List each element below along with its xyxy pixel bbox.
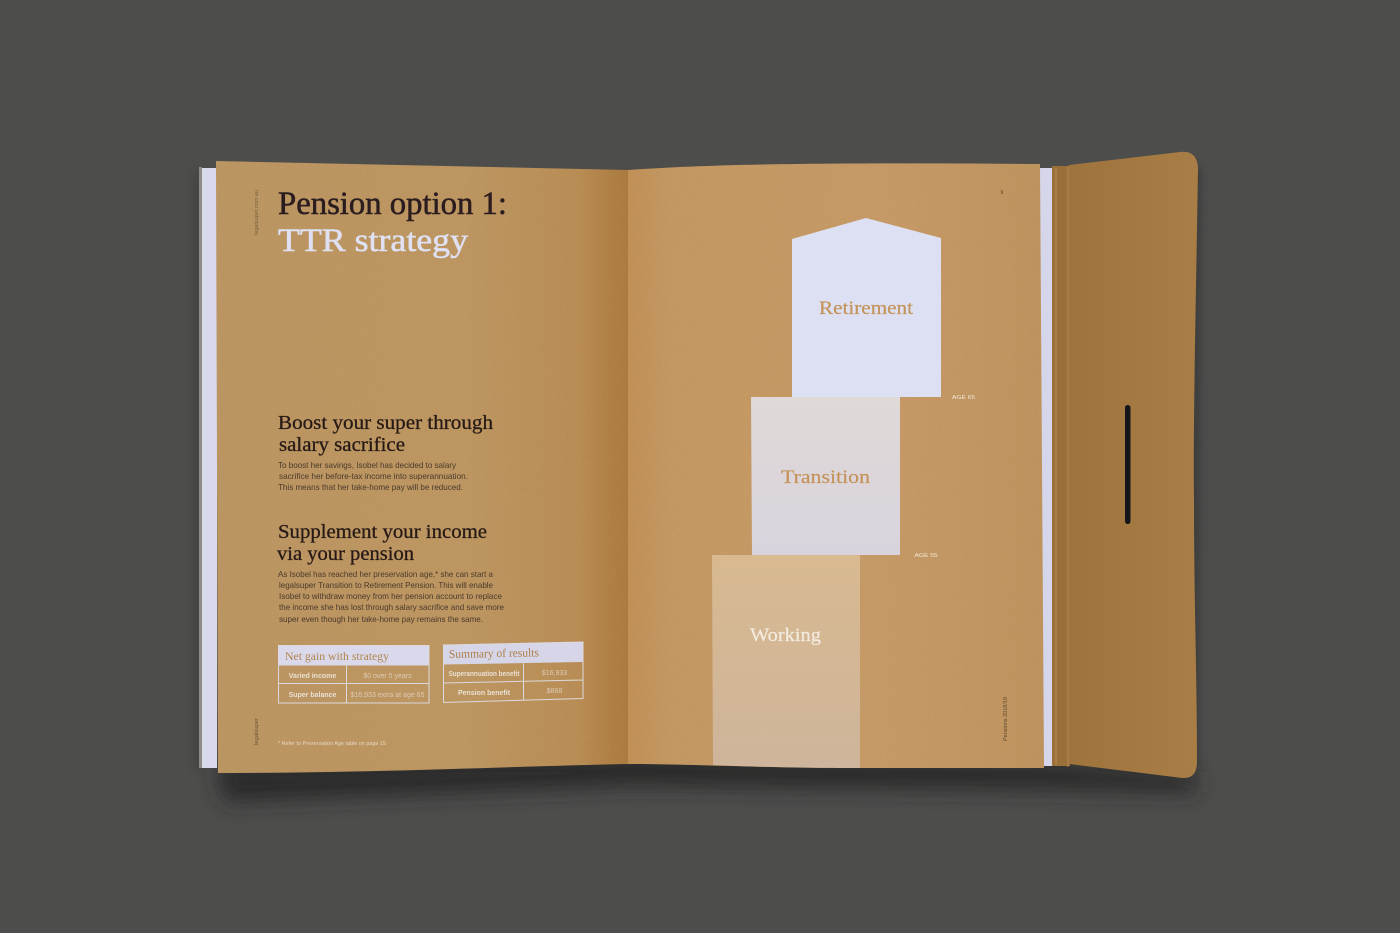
stage: transition: Transition — [781, 467, 871, 488]
right page content — [712, 190, 1009, 768]
table: net gain with strategy: Net gain with strategy — [285, 649, 389, 663]
table: summary of results: Superannuation benefit — [448, 671, 520, 678]
body text: boost your super: sacrifice her before-tax income into superannuation. — [279, 471, 468, 481]
heading: boost your super — [278, 412, 493, 456]
table: net gain with strategy: $0 over 5 years — [363, 673, 412, 680]
title: TTR strategy — [278, 223, 469, 259]
heading: supplement your income — [277, 521, 487, 565]
body text: boost your super — [278, 460, 468, 492]
heading: supplement your income: Supplement your income — [278, 521, 487, 543]
body text: supplement your income — [278, 569, 504, 624]
stage: working: Working — [750, 625, 822, 646]
heading: supplement your income: via your pension — [277, 543, 414, 565]
label: age 65: AGE 65 — [952, 395, 975, 401]
table: summary of results — [444, 642, 583, 702]
heading: boost your super: Boost your super through — [278, 412, 493, 434]
paper speckle texture — [216, 160, 1046, 774]
body text: supplement your income: As Isobel has reached her preservation age,* she can start a — [278, 569, 493, 579]
table: net gain with strategy: Varied income — [289, 673, 336, 680]
folder flap — [1052, 152, 1198, 778]
stage: working — [712, 555, 860, 768]
table: net gain with strategy: $16,933 extra at age 65 — [351, 692, 425, 699]
stage: transition — [751, 397, 900, 555]
vertical site address: legalsuper.com.au — [254, 190, 260, 235]
body text: supplement your income: super even though her take-home pay remains the same. — [279, 614, 483, 624]
stage: retirement house shape: Retirement — [819, 298, 914, 319]
label: age 55: AGE 55 — [914, 553, 938, 559]
heading: boost your super: salary sacrifice — [279, 434, 405, 456]
back pages: right paper edge — [1040, 168, 1053, 766]
table: summary of results: Pension benefit — [458, 690, 511, 697]
vertical publication name: Pensions 2018/19 — [1003, 697, 1009, 741]
back pages: left paper edge — [199, 167, 217, 768]
title: Pension option 1: — [278, 186, 507, 222]
body text: supplement your income: legalsuper Transition to Retirement Pension. This will enable — [279, 580, 493, 590]
page number: 9 — [1000, 190, 1004, 196]
body text: boost your super: To boost her savings, Isobel has decided to salary — [278, 460, 457, 470]
open spread: left and right kraft pages — [216, 161, 1044, 773]
table: net gain with strategy: Super balance — [289, 692, 337, 699]
body text: supplement your income: Isobel to withdraw money from her pension account to replace — [279, 591, 502, 601]
slot in flap — [1125, 405, 1130, 524]
vertical brand name: legalsuper — [254, 718, 260, 745]
left page content — [254, 186, 583, 747]
table: summary of results: $16,933 — [542, 670, 567, 677]
stage: retirement house shape — [792, 218, 941, 397]
body text: boost your super: This means that her take-home pay will be reduced. — [278, 482, 463, 492]
table: summary of results: $868 — [547, 688, 562, 695]
table: summary of results: Summary of results — [449, 645, 539, 661]
book drop shadow — [195, 160, 1201, 802]
table: net gain with strategy — [278, 646, 429, 703]
title — [278, 186, 507, 259]
body text: supplement your income: the income she has lost through salary sacrifice and save more — [279, 602, 504, 612]
footnote: * Refer to Preservation Age table on page 15 — [278, 741, 386, 747]
